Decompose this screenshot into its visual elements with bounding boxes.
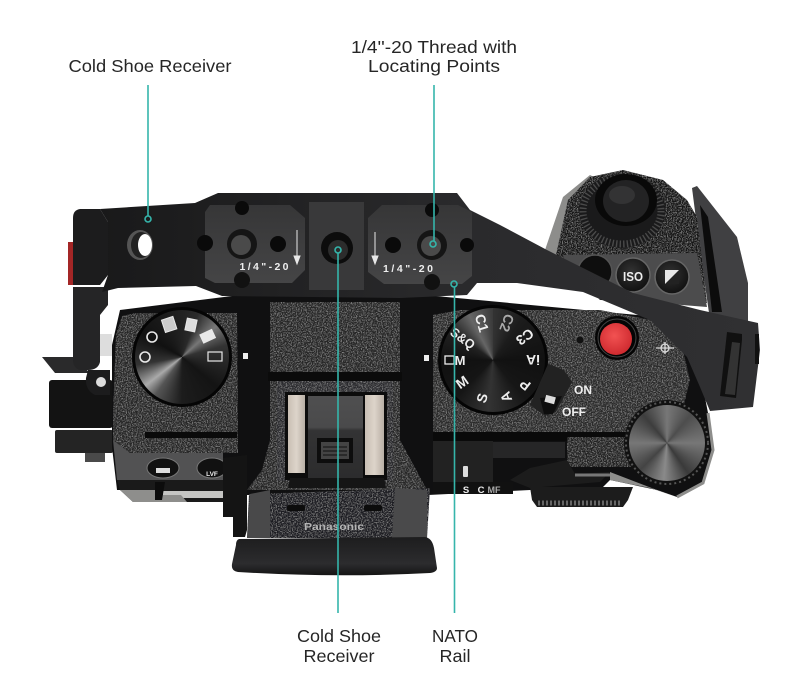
camera illustration: [42, 170, 760, 575]
callout line: cold shoe receiver, top left: [145, 85, 151, 222]
left lower button strip: [113, 440, 227, 502]
mode dial labels: C1: [472, 312, 492, 334]
mode dial labels: C2: [496, 312, 518, 334]
Panasonic logo: Panasonic: [304, 522, 365, 533]
power switch labels: ON: [574, 383, 592, 397]
power switch labels: [562, 383, 592, 419]
viewfinder side block: [223, 455, 247, 537]
mode dial labels: [445, 312, 540, 405]
label: NATO rail: NATO: [432, 626, 478, 646]
label: 1/4"-20 thread with locating points: Locating Points: [368, 56, 500, 76]
hot shoe: [268, 372, 402, 488]
function buttons: [578, 255, 689, 294]
rail pad: left: [197, 201, 305, 288]
left panel shelf: [113, 412, 238, 453]
left clamps and rails: [42, 334, 113, 462]
mode dial labels: iA: [526, 352, 540, 368]
dial icons: [140, 316, 222, 362]
callout line: 1/4"-20 thread: [430, 85, 436, 247]
power lever: [530, 364, 572, 416]
mode dial index: [424, 355, 429, 361]
rail pad: right: [368, 203, 474, 290]
main camera body: [112, 295, 713, 497]
label: cold shoe receiver, bottom: [297, 626, 381, 666]
microphone hole: [576, 336, 584, 344]
label: cold shoe receiver, bottom: Receiver: [304, 646, 375, 666]
mode dial labels: M: [453, 372, 471, 392]
focal plane mark: [656, 342, 674, 354]
function buttons: ISO: [623, 269, 643, 284]
rail pad: right: 1/4"-20: [383, 263, 433, 275]
viewfinder housing: [247, 488, 430, 538]
left exposure dial: [132, 307, 232, 407]
rear control dial: [624, 400, 710, 486]
centre textured hump: [247, 302, 427, 490]
shutter button: [579, 174, 665, 248]
silver edge beside rear dial: [677, 413, 713, 497]
rail pad: left: 1/4"-20: [240, 261, 289, 273]
record button: [595, 316, 639, 360]
mode dial labels: M: [455, 353, 465, 368]
label: cold shoe receiver, bottom: Cold Shoe: [297, 626, 381, 646]
mode dial labels: A: [497, 390, 515, 404]
label: NATO rail: [432, 626, 478, 666]
cage: left end block: [68, 209, 110, 395]
label: 1/4"-20 thread with locating points: [351, 37, 517, 76]
mode dial labels: C3: [513, 325, 537, 349]
mode dial labels: P: [516, 376, 534, 394]
left textured top panel: [113, 313, 238, 430]
right textured top panel: [433, 310, 690, 432]
cage: through hole with thread: [127, 230, 153, 260]
callout line: NATO rail: [451, 281, 457, 613]
label: 1/4"-20 thread with locating points: 1/4''-20 Thread with: [351, 37, 517, 57]
locking button: [317, 438, 353, 463]
mode dial labels: S: [473, 391, 491, 405]
strap loop: [720, 332, 759, 398]
rail pad: centre: [309, 202, 364, 290]
shutter grip block: [556, 170, 707, 303]
cage: top plate and arm: [100, 193, 760, 411]
function button plate: [563, 253, 707, 307]
power switch labels: OFF: [562, 405, 586, 419]
right lower strip: MF: [488, 485, 501, 495]
eyecup: [232, 537, 437, 575]
mode dial: [438, 305, 548, 415]
right lower strip: [433, 432, 677, 507]
white dial index: [243, 353, 248, 359]
label: NATO rail: Rail: [440, 646, 470, 666]
label: cold shoe receiver, top left: Cold Shoe Receiver: [68, 56, 232, 76]
left lower button strip: LVF: [206, 471, 218, 478]
mode dial labels: S&Q: [447, 324, 478, 352]
silver grip edge: [545, 175, 600, 262]
flap inner shadow: [700, 205, 722, 312]
callout line: cold shoe receiver, bottom: [335, 247, 341, 613]
grip side flap: [692, 186, 748, 325]
right lower strip: C: [478, 485, 485, 496]
right lower strip: S: [463, 485, 469, 496]
